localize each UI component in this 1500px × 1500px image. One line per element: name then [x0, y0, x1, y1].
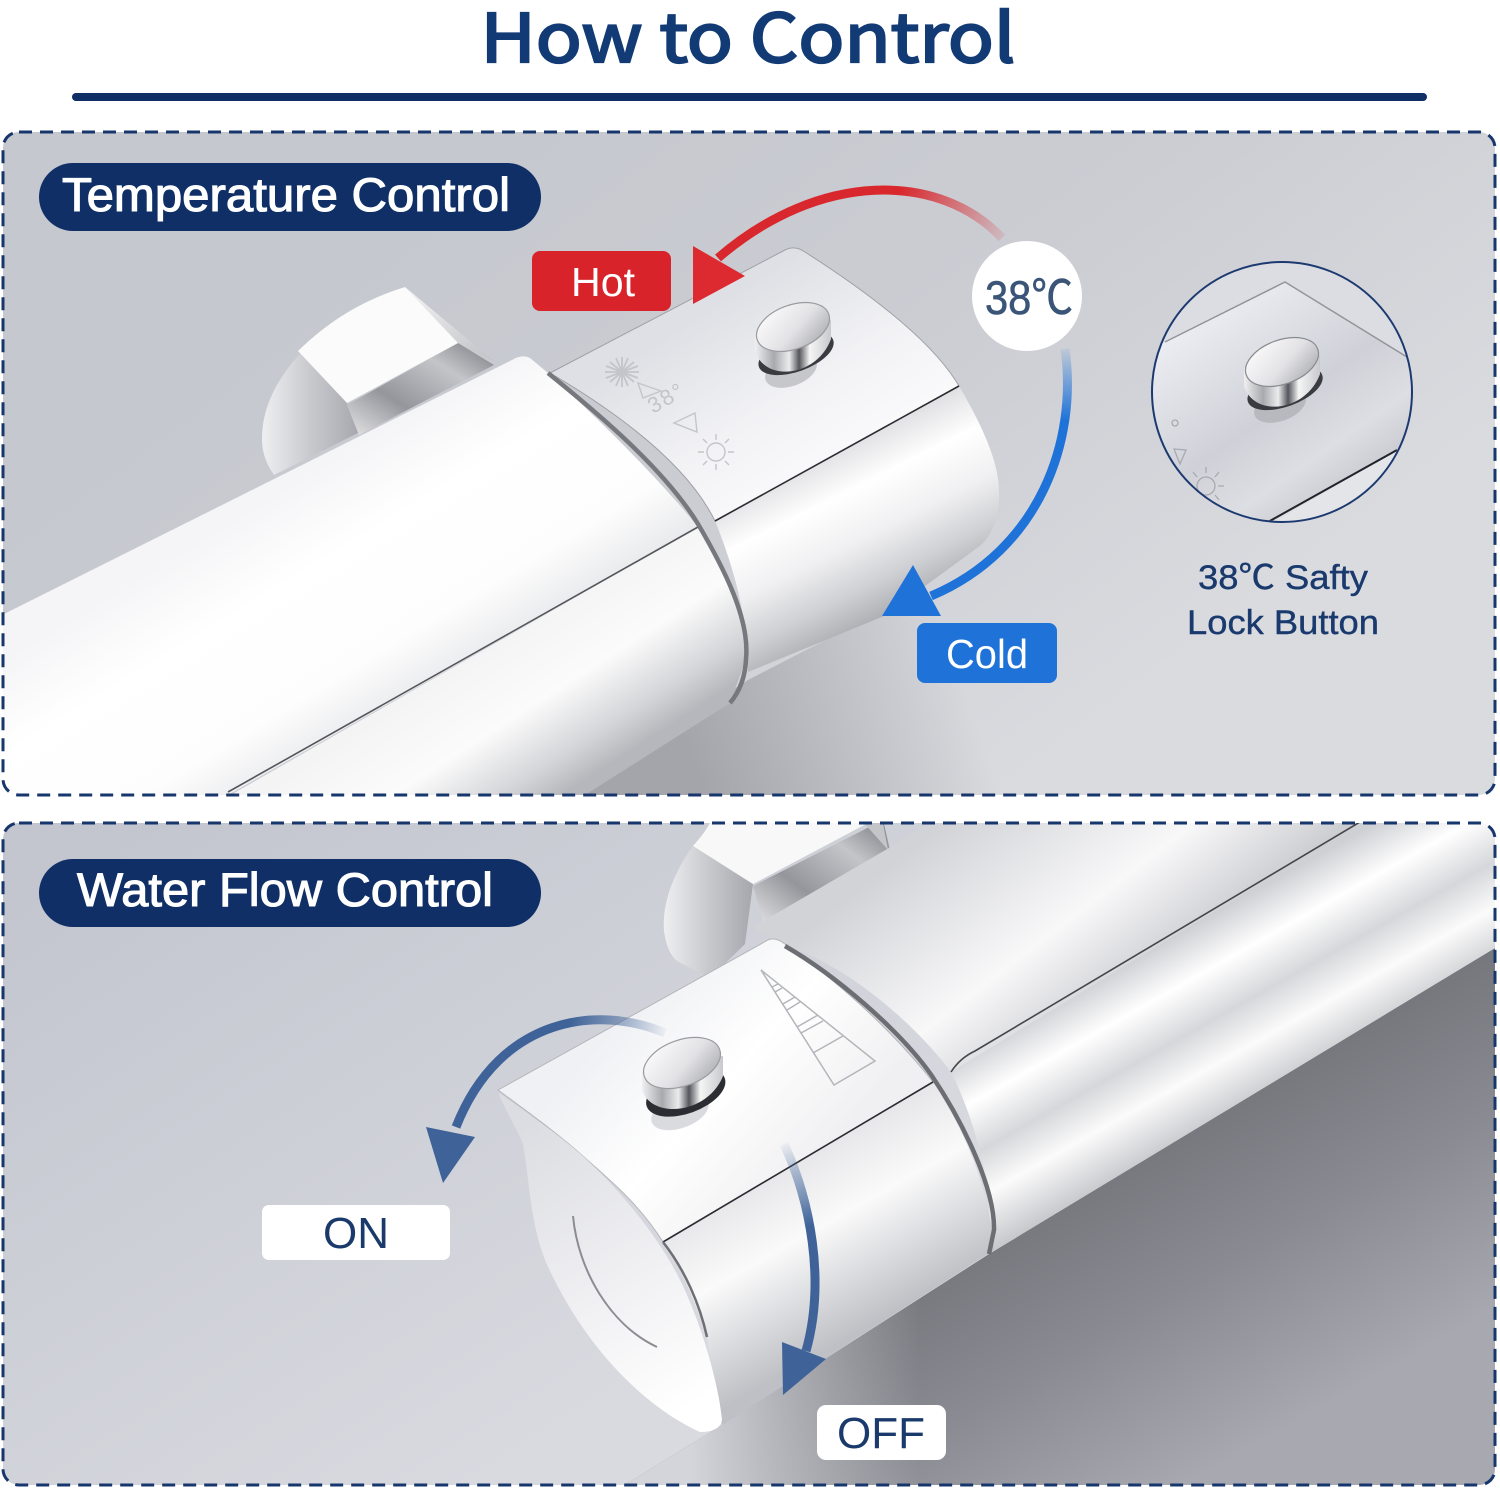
inset lock button: [1244, 336, 1323, 423]
panel: water flow control: [3, 820, 1500, 1500]
inset seam: [1268, 450, 1397, 522]
knob front face: [498, 1092, 722, 1432]
tube upper face: [753, 823, 1360, 1072]
inset engraving: [1172, 420, 1224, 500]
arrow: OFF direction: [782, 1144, 826, 1395]
lock button: [755, 302, 834, 388]
knob lower face: [663, 1082, 994, 1425]
hex nut and wall flange: [262, 287, 494, 475]
inset caption: 38℃ Safty: [1198, 559, 1368, 597]
label: ON: [262, 1205, 450, 1260]
panel background: [3, 823, 1495, 1485]
tube lower face: [222, 527, 746, 800]
label: OFF: [817, 1405, 946, 1460]
badge: 38C: [972, 241, 1082, 351]
tube seam line: [228, 527, 698, 792]
label: Cold: [917, 623, 1057, 683]
arrow: cold direction: [882, 349, 1067, 616]
arrow: ON direction: [426, 1020, 665, 1183]
front recess ring: [573, 1216, 657, 1347]
panel border: [3, 132, 1495, 795]
inset: safety lock button detail: [1140, 262, 1420, 523]
label: ON: ON: [323, 1209, 389, 1258]
label: Hot: [532, 251, 671, 311]
label: Hot: Hot: [571, 259, 636, 305]
engraving: flow scale: [761, 970, 875, 1085]
ground shadow: [600, 945, 1500, 1500]
knob seam line: [663, 1082, 933, 1242]
panel: temperature control: [0, 132, 1495, 800]
tube seam line: [951, 822, 1360, 1072]
knob lower face: [715, 386, 999, 672]
panel border: [3, 823, 1495, 1485]
valve illustration: [498, 820, 1500, 1500]
panel background: [3, 132, 1495, 795]
icon: snowflake: [605, 357, 639, 387]
label: Cold: Cold: [946, 631, 1028, 677]
inset caption: [1187, 559, 1379, 642]
heading pill: Temperature Control: [39, 163, 541, 231]
ground shadow: [588, 617, 958, 795]
tube upper face: [0, 356, 698, 800]
label: OFF: OFF: [837, 1409, 925, 1458]
inset plate: [1153, 283, 1408, 520]
knob seam line: [715, 386, 959, 521]
metal ring: [785, 946, 994, 1254]
triangle marker up: [638, 383, 661, 398]
heading pill: Water Flow Control: [39, 859, 541, 927]
hex nut: [664, 820, 890, 978]
heading pill: Water Flow Control: Water Flow Control: [77, 863, 493, 916]
triangle marker down: [674, 413, 697, 432]
inset lower band: [1272, 450, 1400, 523]
valve illustration: [0, 248, 1000, 800]
icon: sun: [698, 434, 734, 470]
tube lower face: [951, 823, 1500, 1254]
inset caption: Lock Button: [1187, 604, 1379, 642]
engraved 38 degree mark: 38°: [643, 377, 690, 418]
badge: 38C: 38℃: [985, 271, 1073, 324]
knob top face: [550, 248, 959, 521]
title underline: [72, 93, 1427, 101]
arrow: hot direction: [693, 190, 1002, 304]
knob top face: [498, 939, 933, 1242]
heading pill: Temperature Control: Temperature Control: [62, 168, 510, 221]
lock button: [642, 1036, 726, 1130]
engraving: scale: [605, 357, 734, 470]
metal ring: [548, 373, 746, 703]
ground fade: [627, 1312, 899, 1485]
